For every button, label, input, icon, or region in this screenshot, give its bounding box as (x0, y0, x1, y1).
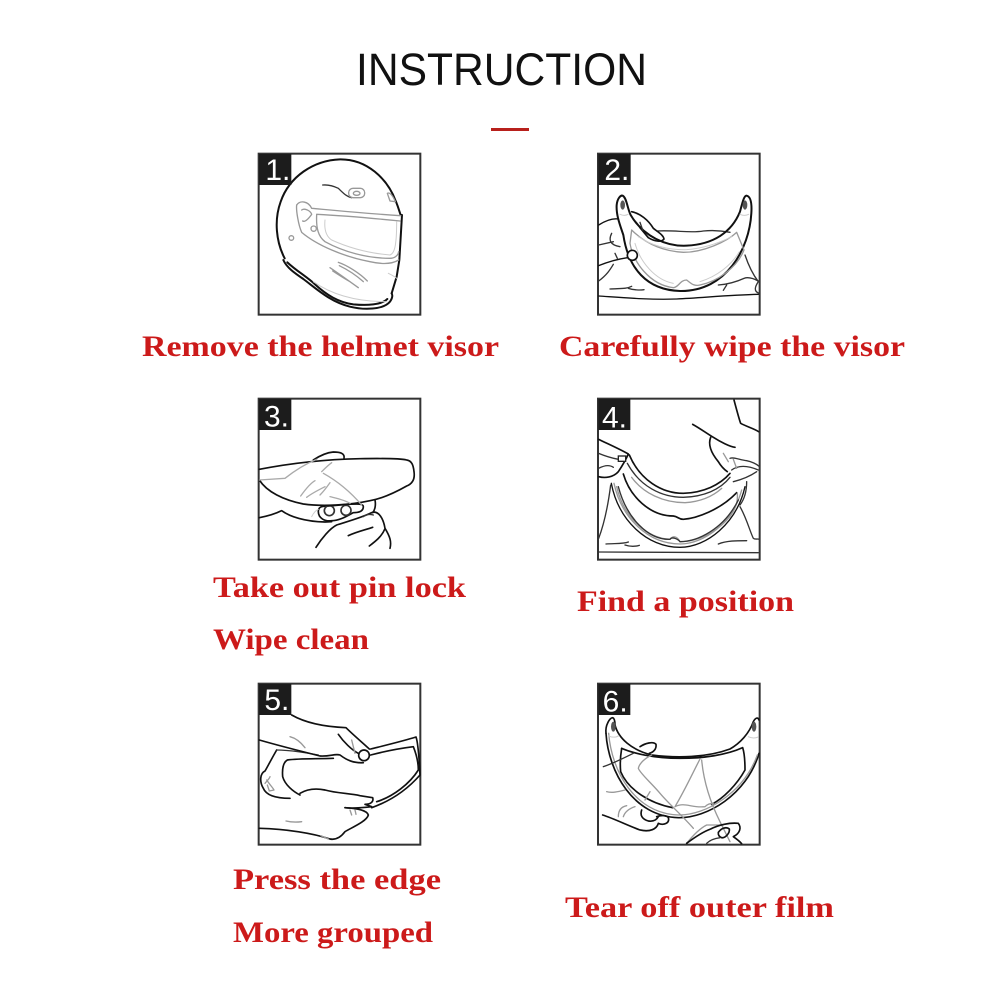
panel: step 4 find position (598, 399, 760, 560)
panel: step 2 wipe visor (598, 154, 760, 315)
panel: step 5 press edge (259, 684, 420, 845)
caption: step 1: Remove the helmet visor (142, 330, 499, 363)
icon: cloth and hands (599, 400, 759, 553)
caption: step 3 line 1: Take out pin lock (213, 571, 466, 604)
caption: step 5 line 1: Press the edge (233, 863, 441, 896)
icon: visor (606, 718, 759, 843)
icon: helmet (277, 159, 402, 309)
icon: hands (603, 743, 742, 844)
caption: step 2: Carefully wipe the visor (559, 330, 905, 363)
number badge 1: 1. (265, 154, 290, 187)
icon: hand (599, 212, 664, 266)
panel: step 3 pin lock (259, 399, 420, 560)
icon: upper hand (259, 715, 369, 763)
icon: pin lock lens (259, 458, 414, 517)
icon: film (261, 737, 420, 808)
panel: step 6 tear film (598, 684, 760, 845)
number badge 3: 3. (264, 401, 289, 434)
icon: visor (617, 196, 751, 291)
number badge 6: 6. (603, 686, 628, 719)
caption: step 5 line 2: More grouped (233, 916, 433, 949)
icon: visor and film (611, 455, 745, 547)
title: INSTRUCTION (356, 44, 647, 95)
panel: step 1 helmet (259, 154, 420, 315)
number badge 2: 2. (604, 154, 629, 187)
number badge 5: 5. (264, 684, 289, 717)
number badge 4: 4. (602, 401, 627, 434)
red title underline (491, 128, 529, 131)
icon: fingers under lens (259, 452, 391, 548)
icon: cloth (599, 231, 759, 299)
icon: lower hand (259, 789, 373, 839)
caption: step 6: Tear off outer film (565, 891, 834, 924)
caption: step 4: Find a position (577, 585, 794, 618)
caption: step 3 line 2: Wipe clean (213, 623, 369, 656)
